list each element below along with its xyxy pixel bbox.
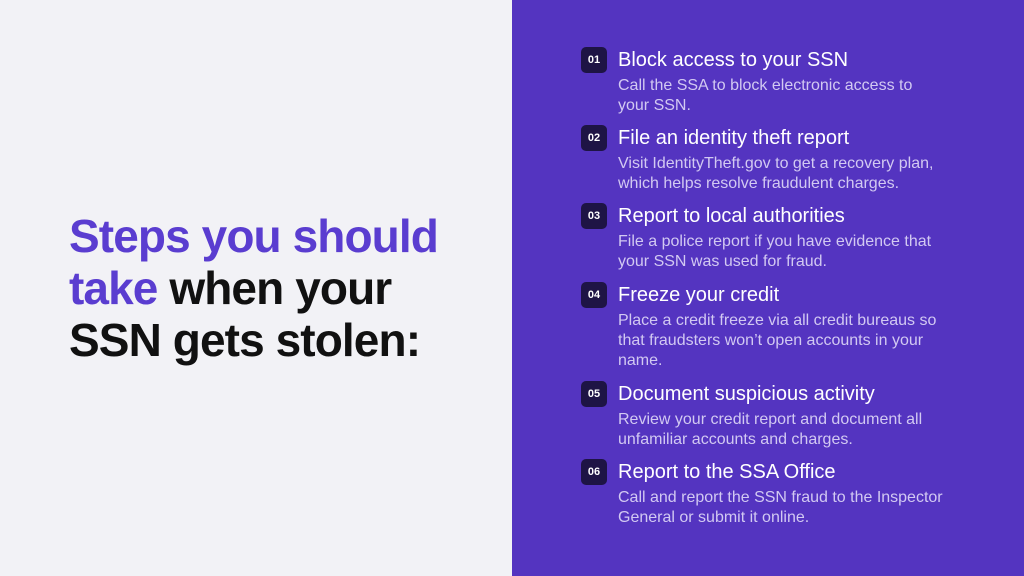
right panel: steps <box>512 0 1024 576</box>
title: Steps you should <box>69 210 438 262</box>
right panel: steps: Call and report the SSN fraud to the Inspector <box>618 489 943 506</box>
right panel: steps: Block access to your SSN <box>618 49 848 71</box>
step 04 <box>581 282 936 369</box>
title: take when your <box>69 262 391 314</box>
right panel: steps: Report to the SSA Office <box>618 461 836 483</box>
right panel: steps: that fraudsters won’t open accounts in your <box>618 332 923 349</box>
step 02 <box>581 125 933 192</box>
right panel: steps: Place a credit freeze via all credit bureaus so <box>618 312 936 329</box>
right panel: steps: General or submit it online. <box>618 509 809 526</box>
left panel <box>0 0 512 576</box>
right panel: steps: Visit IdentityTheft.gov to get a recovery plan, <box>618 155 933 172</box>
right panel: steps: Report to local authorities <box>618 205 845 227</box>
right panel: steps: 04 <box>588 289 600 301</box>
step 01 <box>581 47 912 114</box>
right panel: steps: unfamiliar accounts and charges. <box>618 431 853 448</box>
right panel: steps: 01 <box>588 54 600 66</box>
step 06 <box>581 459 943 526</box>
right panel: steps: Document suspicious activity <box>618 383 875 405</box>
right panel: steps: 02 <box>588 132 600 144</box>
right panel: steps: your SSN was used for fraud. <box>618 253 827 270</box>
right panel: steps: Call the SSA to block electronic access to <box>618 77 912 94</box>
right panel: steps: File an identity theft report <box>618 127 849 149</box>
step 03 <box>581 203 931 270</box>
right panel: steps: 05 <box>588 388 600 400</box>
right panel: steps: your SSN. <box>618 97 691 114</box>
right panel: steps: Review your credit report and document all <box>618 411 922 428</box>
right panel: steps: which helps resolve fraudulent charges. <box>618 175 899 192</box>
right panel: steps: 06 <box>588 466 600 478</box>
step 05 <box>581 381 922 448</box>
right panel: steps: Freeze your credit <box>618 284 779 306</box>
right panel: steps: name. <box>618 352 662 369</box>
title <box>69 210 438 366</box>
right panel: steps: File a police report if you have evidence that <box>618 233 931 250</box>
right panel: steps: 03 <box>588 210 600 222</box>
title: SSN gets stolen: <box>69 314 420 366</box>
